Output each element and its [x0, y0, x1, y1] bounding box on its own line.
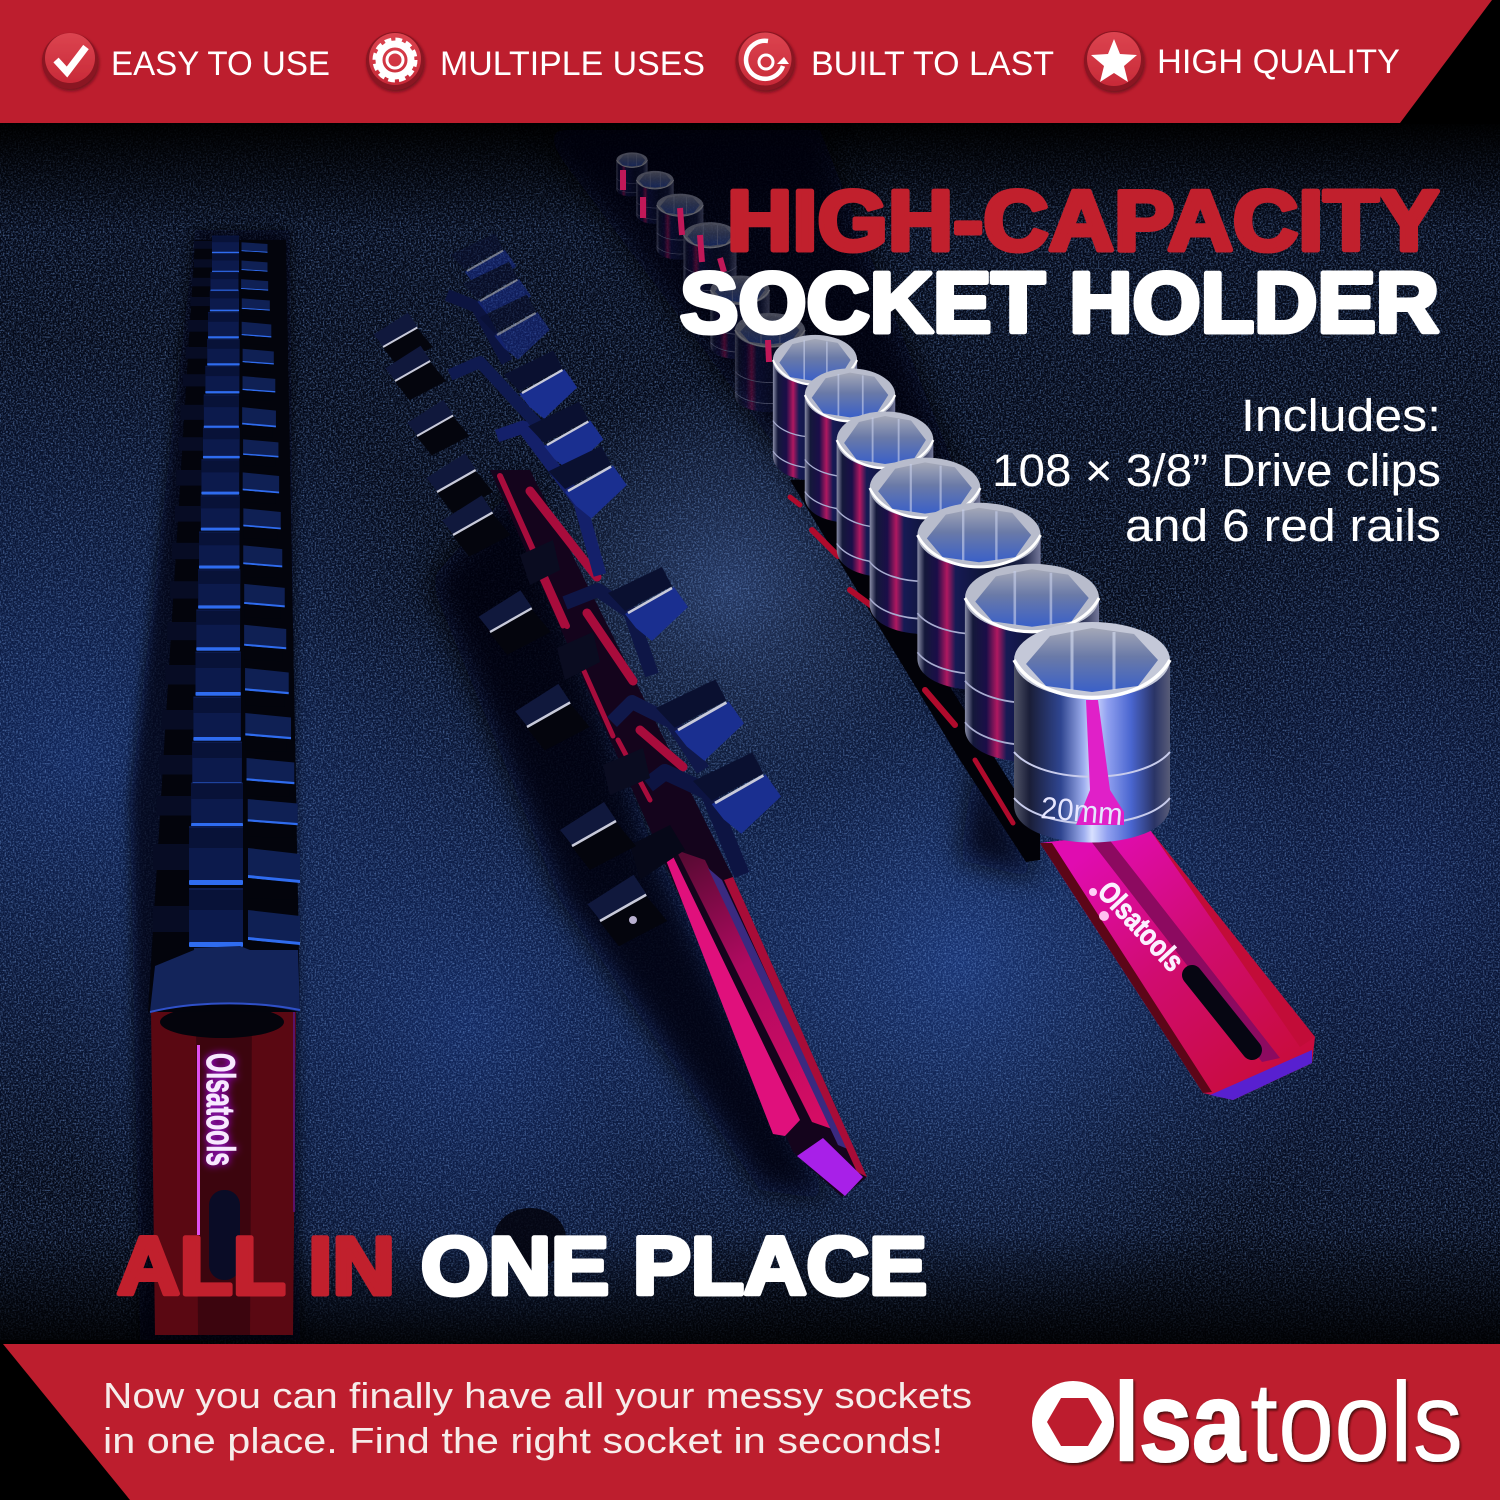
benefit: built to last [736, 32, 1054, 90]
left socket rail [148, 236, 300, 1335]
middle rail: clips [374, 233, 781, 946]
socket 20mm [1014, 622, 1170, 842]
black corner top right [1300, 0, 1500, 124]
benefit: high quality: HIGH QUALITY [1157, 43, 1400, 81]
left rail: red end with logo: Olsatools [198, 1053, 242, 1166]
socket 20mm: 20mm [1039, 790, 1124, 832]
right rail: red end with logo: Olsatools [1091, 875, 1190, 978]
brand logo: l [1113, 1359, 1140, 1485]
bottom red band [3, 1344, 1500, 1500]
brand logo [1032, 1359, 1463, 1485]
bottom description: Now you can finally have all your messy sockets [103, 1375, 972, 1416]
black corner bottom left [0, 1340, 200, 1500]
includes text: 108 × 3/8” Drive clips [992, 445, 1441, 496]
icon: star [1084, 31, 1144, 91]
benefit: multiple uses [366, 32, 705, 90]
includes text [992, 390, 1441, 551]
bottom description [103, 1375, 972, 1461]
benefit: high quality [1084, 31, 1400, 91]
bottom description: in one place. Find the right socket in seconds! [103, 1420, 943, 1461]
right rail: red end with logo [790, 480, 1315, 1100]
icon: gear [366, 32, 424, 90]
includes text: and 6 red rails [1125, 500, 1441, 551]
slogan: all in one place [117, 1221, 927, 1312]
benefit: built to last: BUILT TO LAST [811, 45, 1054, 83]
icon: check [42, 33, 98, 89]
includes text: Includes: [1241, 390, 1441, 441]
top red band [0, 0, 1492, 123]
brand logo: O [1037, 1359, 1109, 1485]
benefit: multiple uses: MULTIPLE USES [440, 45, 705, 83]
dark clip on the mat [494, 1208, 566, 1268]
brand logo: tools [1250, 1359, 1463, 1485]
slogan: all in one place: ONE PLACE [421, 1221, 927, 1312]
icon: cycle gear [736, 32, 794, 90]
left rail: red end with logo [151, 1006, 296, 1335]
benefit: easy to use: EASY TO USE [111, 45, 330, 83]
left rail: stacked clips [148, 236, 300, 1012]
title [680, 174, 1439, 351]
middle rail: channel [490, 470, 867, 1197]
benefit: easy to use [42, 33, 330, 89]
middle socket rail [374, 233, 867, 1197]
brand logo: sa [1139, 1359, 1246, 1485]
title: SOCKET HOLDER [680, 256, 1439, 351]
row of chrome sockets [616, 152, 1170, 842]
title: HIGH-CAPACITY [727, 174, 1439, 269]
slogan: all in one place: ALL IN [117, 1221, 395, 1312]
